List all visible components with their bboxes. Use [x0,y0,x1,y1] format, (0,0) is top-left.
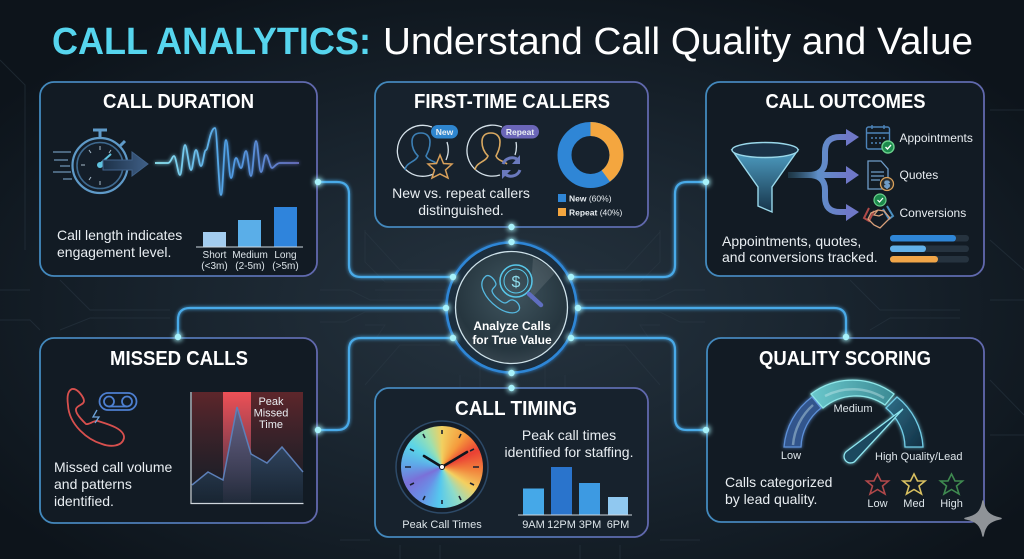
icon: funnel [732,142,798,212]
label: quotes: Quotes [900,168,938,182]
bar chart: timing [518,467,632,531]
icon: repeat caller [467,125,539,179]
chart: missed calls area: Missed [254,408,288,420]
arrows: funnel branches [788,129,859,221]
text: outcomes: Appointments, quotes, [722,233,861,249]
bar chart: duration: (2-5m) [235,261,265,272]
icon: calendar [866,125,894,153]
bar chart: timing: 3PM [579,519,601,531]
icon: new caller: New [436,127,454,137]
icon: right arrow [103,152,148,176]
bar chart: timing: 9AM [522,519,545,531]
icon: clock [396,421,488,513]
gauge [784,380,923,463]
gauge highlights [793,389,884,445]
label: peak call times: Peak Call Times [402,519,482,531]
panel: quality scoring [707,338,984,522]
title: Understand Call Quality and Value [383,21,973,63]
label: high quality: High Quality/Lead [875,451,962,463]
icon: handshake [864,194,893,228]
text: new vs repeat: New vs. repeat callers [392,185,530,201]
heading: missed calls: MISSED CALLS [110,348,248,370]
panel: first-time callers: distinguished. [418,202,504,218]
text: missed calls: Missed call volume [54,459,172,475]
panel: missed calls [40,338,317,523]
panel: missed calls: identified. [54,493,114,509]
connector nodes [175,179,849,433]
panel: call outcomes: and conversions tracked. [722,249,878,265]
panel: call outcomes [706,82,984,276]
label: medium: Medium [833,403,873,415]
connector lines [178,182,846,430]
panel: call timing: identified for staffing. [505,444,633,460]
bar chart: duration: Medium [232,250,268,261]
bar chart: duration: Long [274,250,297,261]
title [52,21,973,63]
hub label: Analyze Calls [473,319,551,333]
bar chart: duration: Short [203,250,227,261]
donut chart [564,129,616,181]
legend: donut: Repeat (40%) [569,208,623,218]
panel: quality scoring: by lead quality. [725,491,817,507]
central hub: for True Value [472,333,552,347]
heading: quality scoring: QUALITY SCORING [759,348,931,370]
panel: call duration [40,82,317,276]
icon: document: $ [884,180,890,190]
icon: sparkle watermark [965,501,1001,536]
legend: donut [558,194,623,218]
panel: first-time callers [375,82,648,227]
bar chart: timing: 12PM [547,519,576,531]
icon: rating stars: Med [903,498,925,510]
icon: rating stars [866,474,963,510]
icon: repeat caller: Repeat [506,127,534,137]
bar chart: timing: 6PM [607,519,629,531]
label: appointments: Appointments [900,131,973,145]
icon: phone and magnifier: $ [512,274,521,291]
icon: voicemail [100,393,136,410]
heading: call outcomes: CALL OUTCOMES [766,91,926,113]
chart: missed calls area: Peak [258,396,284,408]
label: conversions: Conversions [900,206,966,220]
icon: rating stars: High [940,498,963,510]
panel: missed calls: and patterns [54,476,132,492]
legend: donut: New (60%) [569,194,612,204]
chart: missed calls area [191,392,304,504]
text: quality: Calls categorized [725,474,832,490]
bar chart: duration: (>5m) [272,261,299,272]
label: low: Low [781,450,801,462]
heading: call duration: CALL DURATION [103,91,254,113]
bar chart: duration [196,207,303,272]
panel: call timing [375,388,648,537]
text: call length: Call length indicates [57,227,182,243]
heading: first-time callers: FIRST-TIME CALLERS [414,91,610,113]
panel: call duration: engagement level. [57,244,171,260]
icon: rating stars: Low [867,498,888,510]
icon: document [868,161,894,190]
icon: new caller [397,125,458,178]
title: CALL ANALYTICS: [52,21,371,63]
icon: stopwatch [53,130,128,193]
progress bars [890,235,969,262]
text: peak call: Peak call times [522,427,616,443]
heading: call timing: CALL TIMING [455,398,577,420]
waveform [155,128,299,195]
central hub [446,242,576,372]
bar chart: duration: (<3m) [201,261,228,272]
chart: missed calls area: Time [259,419,283,431]
icon: missed call phone [67,389,124,446]
